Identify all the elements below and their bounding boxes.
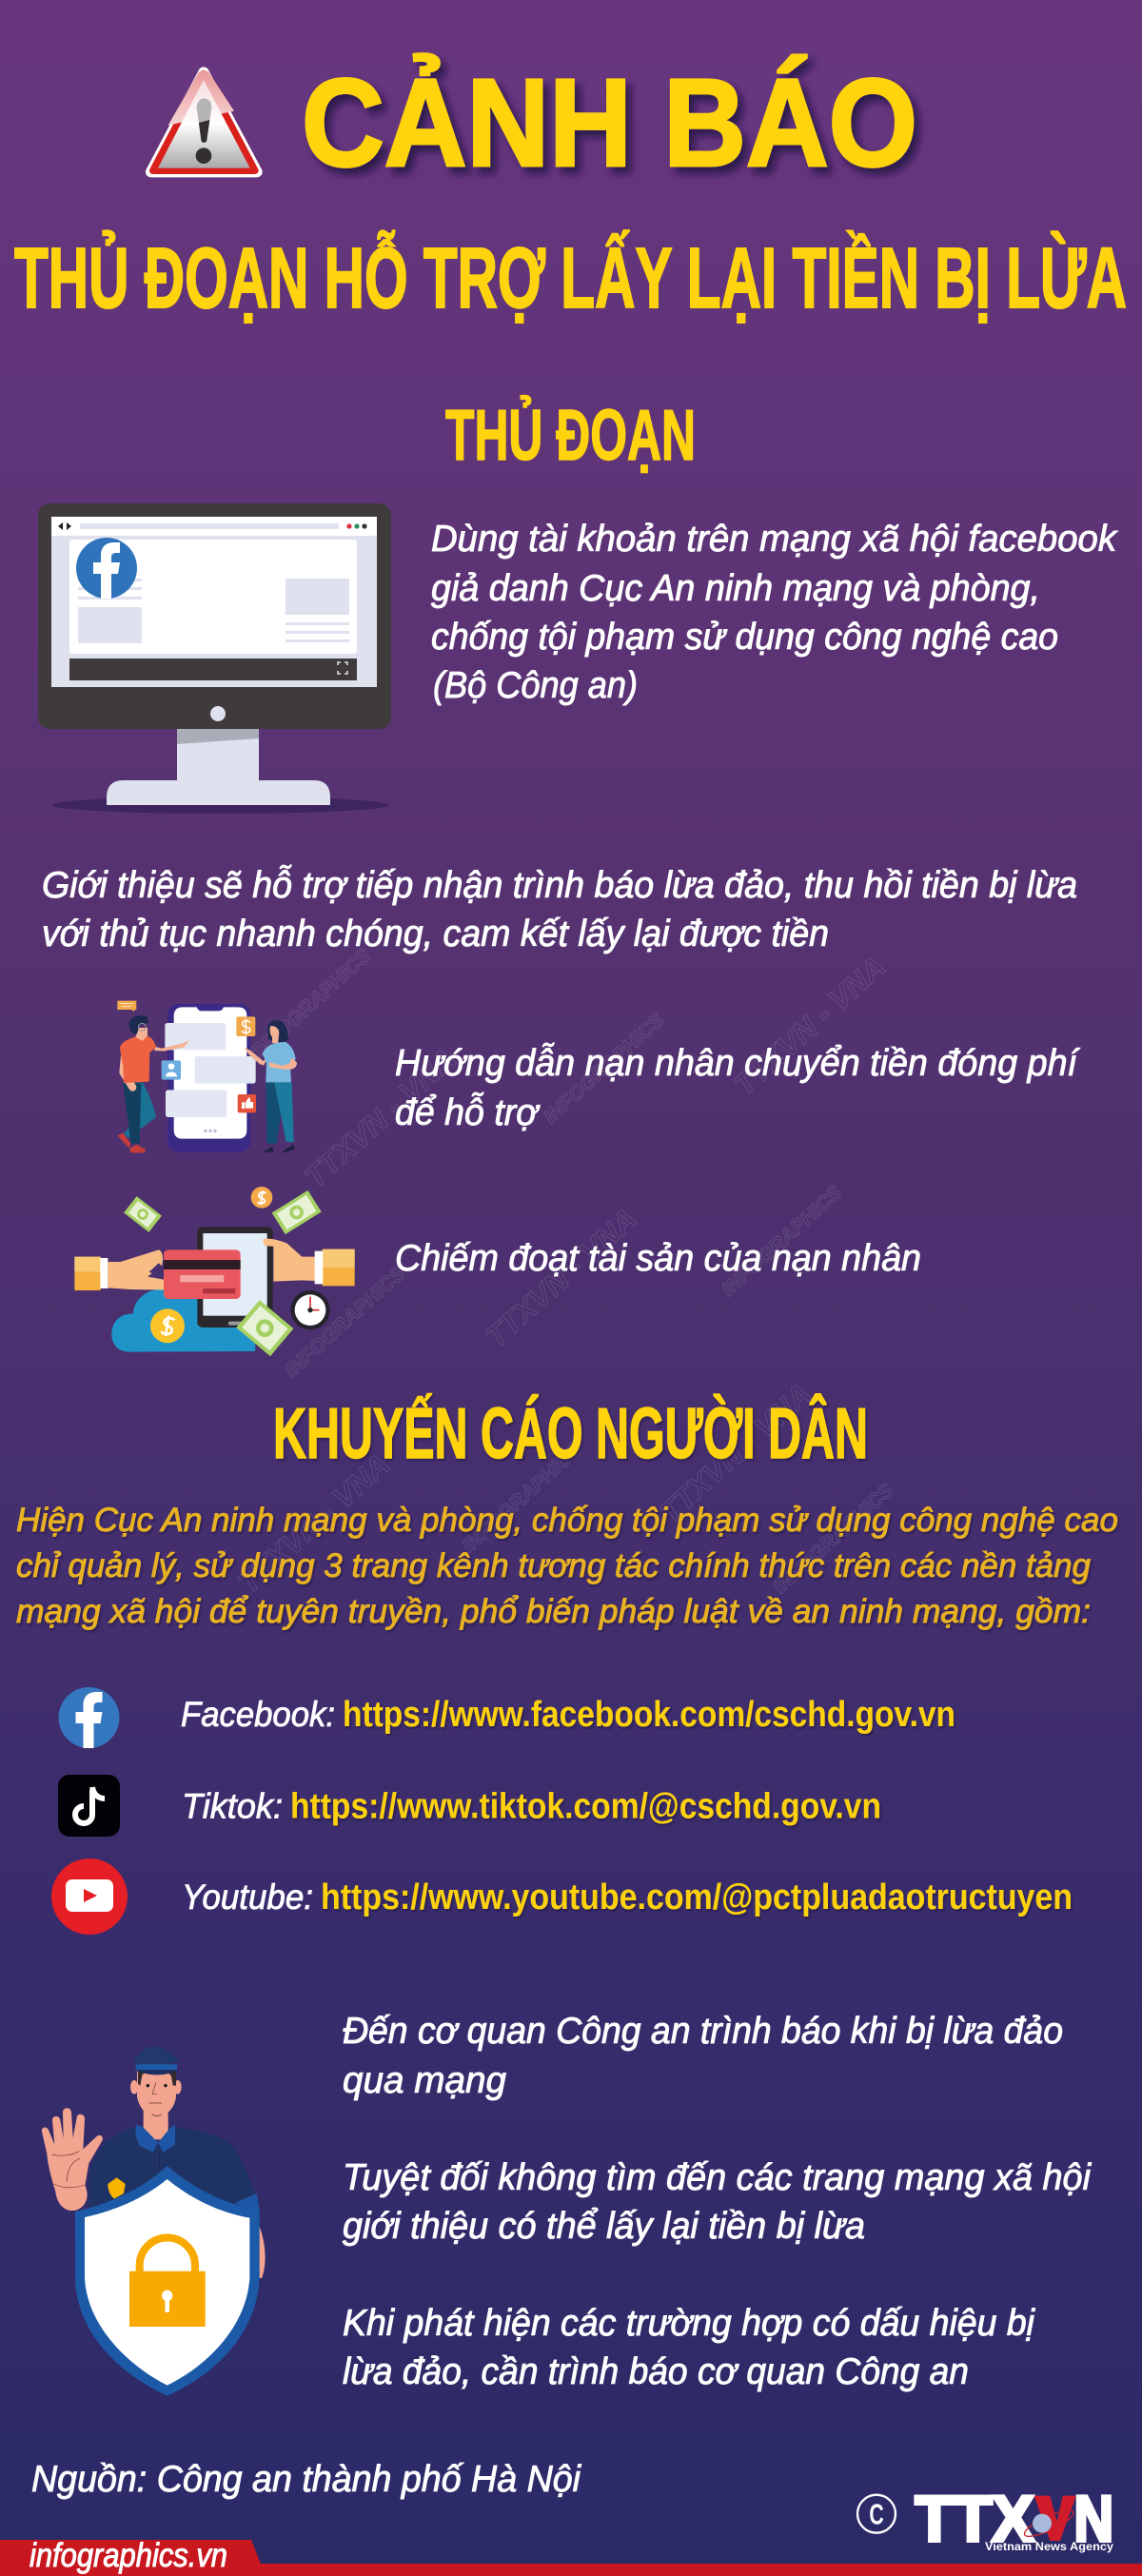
- link: tiktok: https://www.tiktok.com/@cschd.gov.vn: [290, 1787, 881, 1827]
- watermarks: TTXVN - VNA: [479, 1201, 643, 1354]
- text: advice list: Tuyệt đối không tìm đến các trang mạng xã hội: [343, 2157, 1092, 2198]
- text: fee transfer: để hỗ trợ: [395, 1091, 541, 1133]
- text: facebook impersonation: Dùng tài khoản trên mạng xã hội facebook: [431, 519, 1118, 560]
- source: Nguồn: Công an thành phố Hà Nội: [31, 2459, 581, 2500]
- watermarks: TTXVN - VNA: [727, 949, 892, 1102]
- link: facebook: Facebook:: [181, 1695, 335, 1734]
- watermarks: TTXVN - VNA: [653, 1376, 817, 1529]
- logo: TTXVN: [857, 2484, 1113, 2555]
- icon: computer monitor with facebook page: [38, 503, 391, 814]
- text: facebook impersonation: [431, 519, 1118, 706]
- watermarks: INFOGRAPHICS: [246, 945, 375, 1064]
- watermarks: INFOGRAPHICS: [540, 1010, 668, 1129]
- text: introduction: với thủ tục nhanh chóng, cam kết lấy lại được tiền: [42, 914, 829, 954]
- text: advice list: Khi phát hiện các trường hợp có dấu hiệu bị: [343, 2303, 1035, 2344]
- watermarks: TTXVN - VNA: [298, 1041, 463, 1194]
- watermarks: INFOGRAPHICS: [769, 1480, 897, 1599]
- link: youtube: https://www.youtube.com/@pctpluadaotructuyen: [321, 1878, 1073, 1917]
- watermarks: [231, 945, 897, 1600]
- icon: police officer with lock shield: [42, 2046, 266, 2396]
- text: official channels note: mạng xã hội để tuyên truyền, phổ biến pháp luật về an ninh mạng, gồm:: [16, 1593, 1091, 1630]
- footer red band: [0, 2540, 1142, 2576]
- heading: thủ đoạn: THỦ ĐOẠN: [445, 395, 696, 475]
- text: official channels note: Hiện Cục An ninh mạng và phòng, chống tội phạm sử dụng công nghệ cao: [16, 1502, 1118, 1539]
- text: advice list: [343, 2011, 1092, 2392]
- link: tiktok: Tiktok:: [182, 1787, 283, 1825]
- link: facebook: https://www.facebook.com/cschd.gov.vn: [343, 1695, 955, 1735]
- watermarks: INFOGRAPHICS: [281, 1263, 409, 1382]
- icon: facebook: [59, 1687, 120, 1748]
- text: fee transfer: [395, 1043, 1080, 1133]
- icon: people with smartphone: [117, 1001, 297, 1152]
- text: asset appropriation: Chiếm đoạt tài sản của nạn nhân: [395, 1238, 921, 1279]
- text: advice list: lừa đảo, cần trình báo cơ quan Công an: [343, 2351, 969, 2392]
- text: facebook impersonation: chống tội phạm sử dụng công nghệ cao: [431, 617, 1058, 658]
- logo: TTXVN: N: [1074, 2484, 1113, 2555]
- watermarks: TTXVN - VNA: [231, 1446, 396, 1600]
- text: introduction: Giới thiệu sẽ hỗ trợ tiếp nhận trình báo lừa đảo, thu hồi tiền bị lừa: [42, 864, 1077, 906]
- text: introduction: [42, 864, 1077, 954]
- text: advice list: giới thiệu có thể lấy lại tiền bị lừa: [343, 2206, 865, 2247]
- watermarks: INFOGRAPHICS: [458, 1439, 586, 1558]
- title: CẢNH BÁO: [302, 52, 917, 192]
- text: advice list: qua mạng: [343, 2060, 506, 2101]
- icon: youtube: [51, 1858, 128, 1935]
- text: fee transfer: Hướng dẫn nạn nhân chuyển tiền đóng phí: [395, 1043, 1080, 1084]
- icon: warning triangle: [151, 70, 257, 172]
- footer site name: infographics.vn: [30, 2537, 227, 2574]
- text: official channels note: chỉ quản lý, sử dụng 3 trang kênh tương tác chính thức trên các nền tảng: [16, 1547, 1092, 1584]
- text: facebook impersonation: (Bộ Công an): [433, 665, 638, 706]
- logo: TTXVN: C: [869, 2499, 884, 2531]
- text: facebook impersonation: giả danh Cục An ninh mạng và phòng,: [431, 568, 1040, 609]
- icon: tiktok: [58, 1775, 120, 1837]
- text: official channels note: [16, 1502, 1118, 1630]
- link: youtube: Youtube:: [182, 1878, 313, 1917]
- icon: hands with card, tablet and money: [74, 1187, 355, 1356]
- logo: TTXVN: Vietnam News Agency: [985, 2540, 1113, 2553]
- text: advice list: Đến cơ quan Công an trình báo khi bị lừa đảo: [343, 2011, 1063, 2052]
- logo: TTXVN: TTX: [916, 2484, 1034, 2555]
- watermarks: INFOGRAPHICS: [718, 1182, 846, 1301]
